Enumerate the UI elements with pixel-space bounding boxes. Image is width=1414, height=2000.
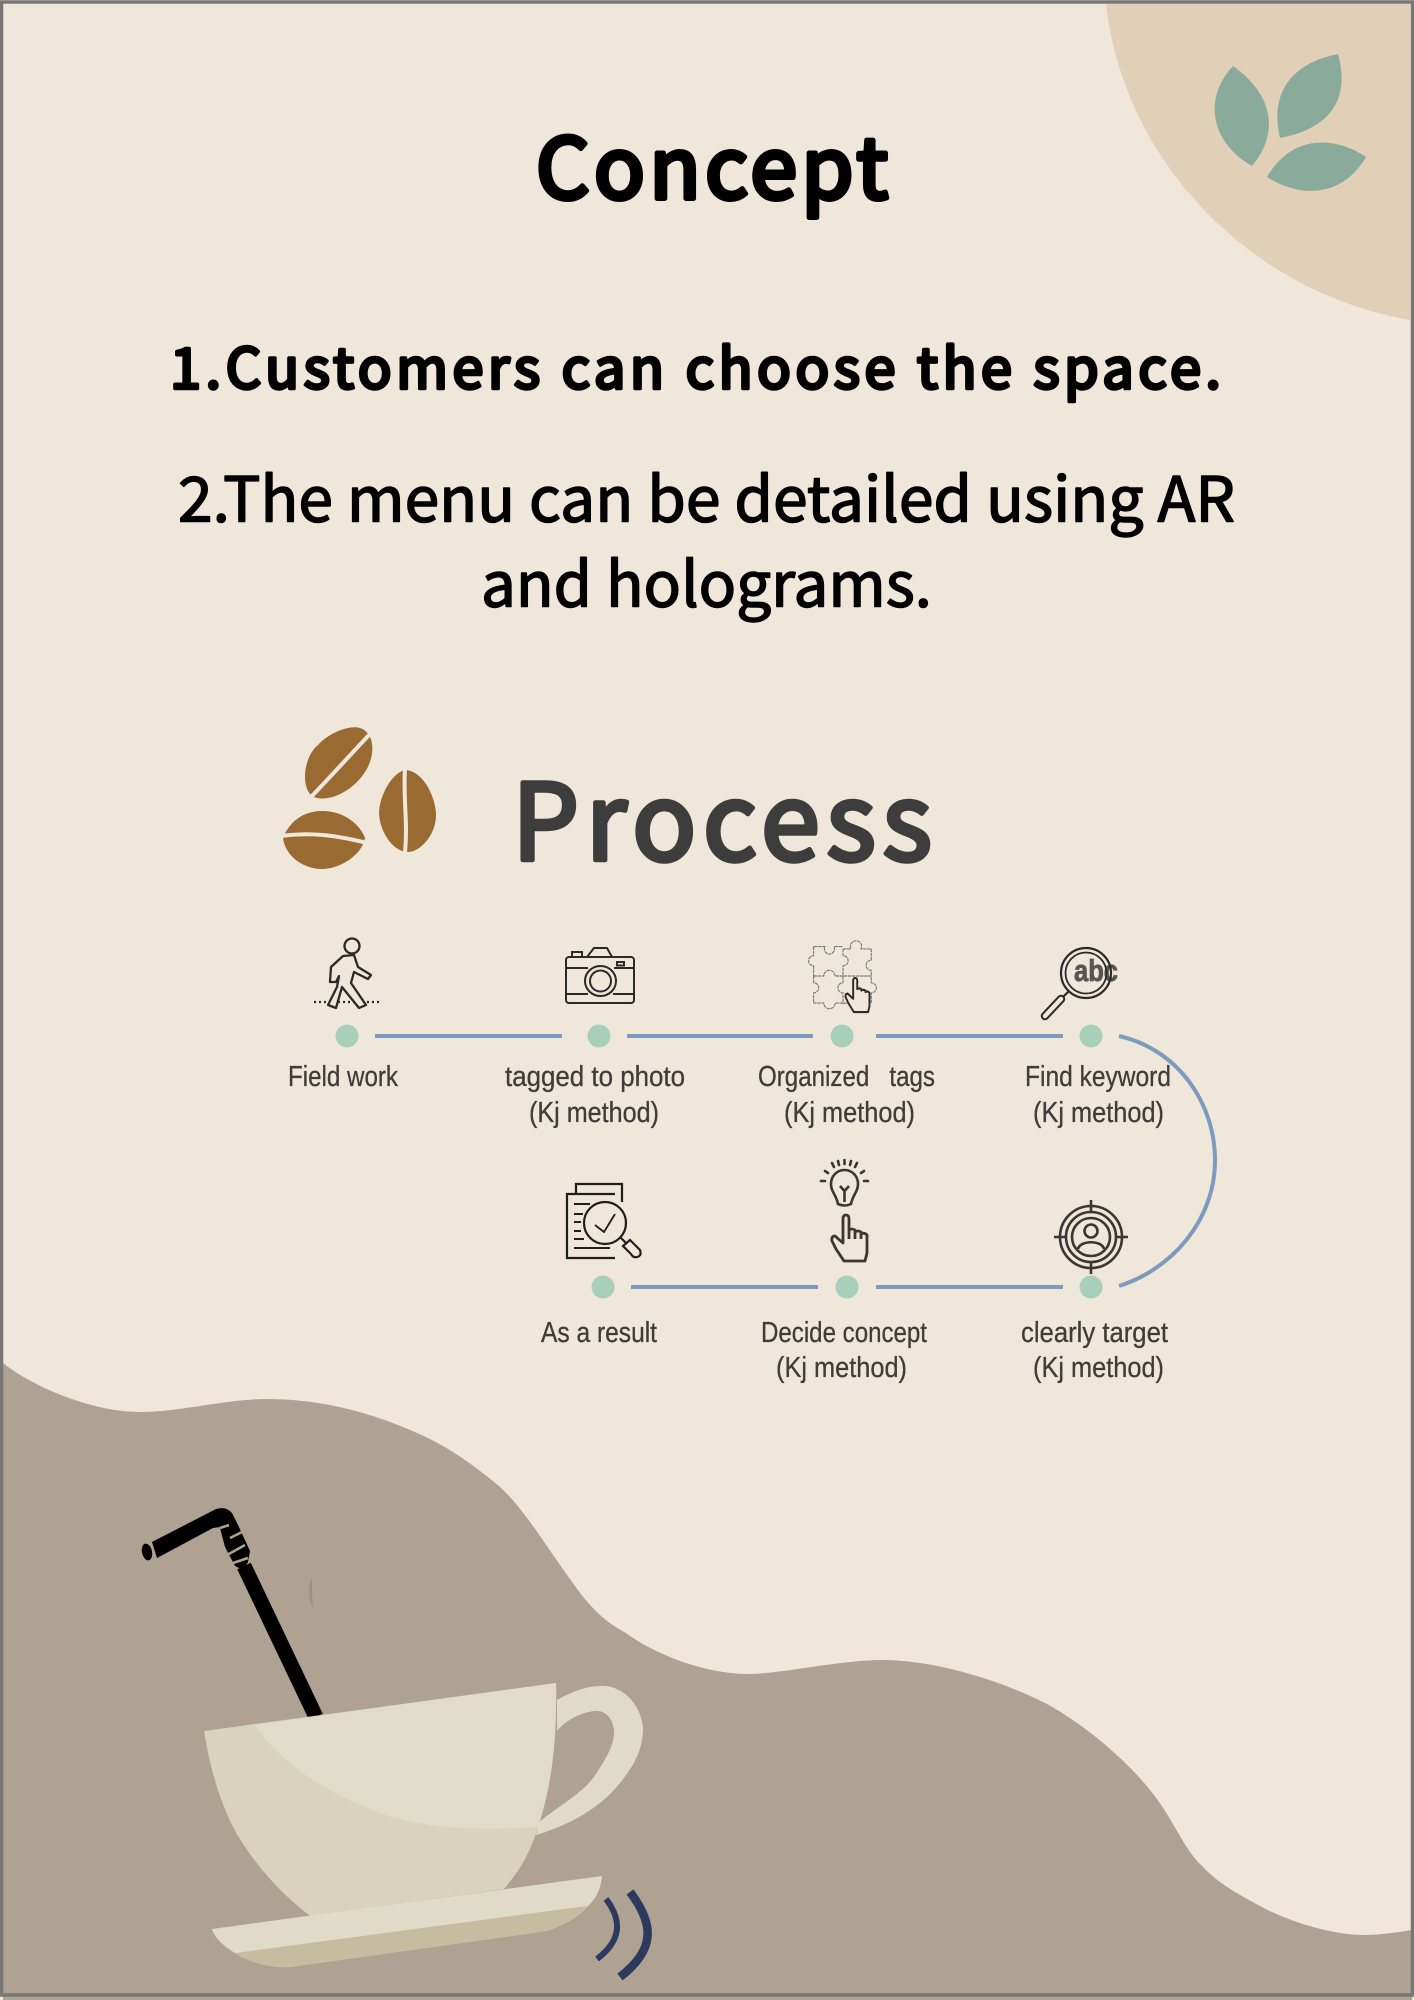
icon: magnifier with abc bbox=[1045, 948, 1118, 1016]
icon: report with magnifier bbox=[567, 1184, 641, 1258]
icon: walking person bbox=[314, 938, 380, 1008]
label: find keyword: Find keyword bbox=[1025, 1061, 1171, 1093]
saucer bbox=[212, 1876, 602, 1967]
timeline dots bbox=[336, 1024, 1102, 1298]
text block: concept point 2: and holograms. bbox=[481, 534, 932, 624]
process step labels bbox=[288, 1061, 1171, 1384]
title: Concept: Concept bbox=[536, 102, 888, 224]
label: decide concept: (Kj method) bbox=[776, 1352, 907, 1384]
icon: coffee beans bbox=[281, 727, 436, 869]
label: field work: Field work bbox=[288, 1061, 398, 1093]
icon: magnifier with abc: abc bbox=[1074, 953, 1118, 988]
corner shape with leaves bbox=[1106, 4, 1410, 320]
text block: concept point 1: 1.Customers can choose the space. bbox=[170, 324, 1221, 406]
bottom wave background bbox=[3, 1363, 1412, 2000]
illustration: coffee cup with straw bbox=[140, 1508, 643, 1967]
label: clearly target: clearly target bbox=[1021, 1317, 1168, 1349]
text block: concept point 2: 2.The menu can be detailed using AR bbox=[178, 450, 1235, 540]
icon: target with person bbox=[1054, 1200, 1128, 1274]
cup handle bbox=[536, 1686, 643, 1835]
saucer shadow bbox=[235, 1906, 587, 1967]
label: decide concept: Decide concept bbox=[761, 1317, 927, 1349]
process timeline connectors bbox=[375, 1036, 1215, 1287]
label: organized tags: (Kj method) bbox=[784, 1097, 915, 1129]
heading: Process: Process bbox=[512, 737, 932, 891]
cup body bbox=[204, 1683, 556, 1916]
icon: vibration arcs bbox=[597, 1892, 648, 1977]
label: tagged to photo: (Kj method) bbox=[529, 1097, 659, 1129]
label: clearly target: (Kj method) bbox=[1033, 1352, 1164, 1384]
icon: leaves bbox=[1215, 54, 1366, 191]
icon: lightbulb and pointing hand bbox=[821, 1160, 868, 1261]
label: find keyword: (Kj method) bbox=[1033, 1097, 1164, 1129]
small steam mark bbox=[309, 1577, 313, 1608]
label: organized tags: Organized tags bbox=[758, 1061, 935, 1093]
straw bbox=[140, 1508, 316, 1717]
label: as a result: As a result bbox=[541, 1317, 657, 1349]
cup highlight bbox=[255, 1683, 556, 1829]
icon: camera bbox=[566, 948, 634, 1003]
label: tagged to photo: tagged to photo bbox=[505, 1061, 685, 1093]
icon: puzzle with hand bbox=[809, 941, 876, 1012]
